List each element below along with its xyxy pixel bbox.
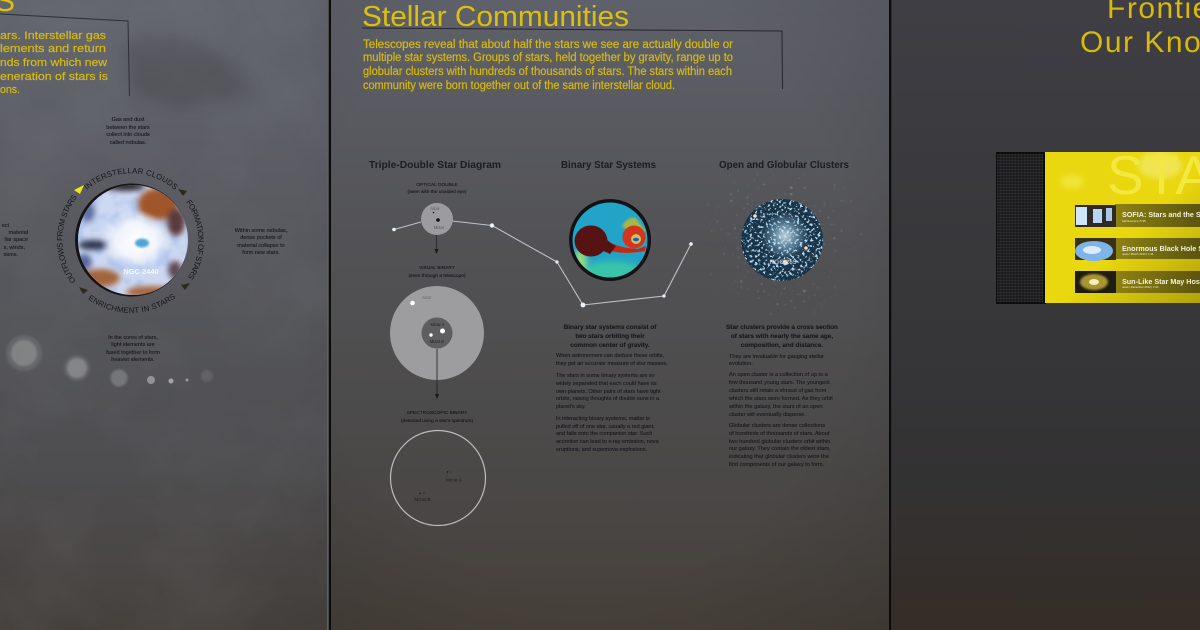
image: binary star simulation [569,199,651,283]
text block: binary star systems: two stars orbiting their [575,333,645,340]
column headings: Binary Star Systems [561,160,656,171]
ring labels [57,168,204,313]
caption: outflows: ect [2,223,9,229]
intro text: globular clusters with hundreds of thousands of stars. The stars within each [363,66,732,78]
intro text: community were born together out of the same interstellar cloud. [363,80,675,92]
image: NGC 2440 nebula [76,181,190,298]
caption: formation of stars: dense pockets of [240,235,282,241]
intro frame [0,14,130,96]
text block: binary star systems: pulled off of one star, usually a red giant, [556,424,655,430]
caption: interstellar clouds: Gas and dust [112,117,145,123]
text block: open and globular clusters [726,324,838,468]
caption: enrichment [106,335,160,363]
text block: binary star systems: common center of gravity. [570,342,650,349]
title: Stellar Communities [362,1,629,33]
text block: open and globular clusters: cluster will eventually disperse. [729,412,806,418]
panel seams [327,0,891,630]
text block: open and globular clusters: evolution. [729,361,753,367]
caption: formation of stars: Within some nebulas, [235,228,288,234]
ring labels: OUTFLOWS FROM STARS [57,194,76,283]
speaker grille [996,152,1046,304]
text block: binary star systems: own planets. Other pairs of stars have tight [556,389,661,395]
caption: outflows: llar space [4,237,28,243]
diagram: spectroscopic binary [390,410,486,526]
text block: open and globular clusters: first components of our galaxy to form. [729,462,825,468]
ring: dark backing of nebula [75,184,188,296]
intro text: Telescopes reveal that about half the stars we see are actually double or [363,39,733,51]
text block: binary star systems [555,324,668,453]
intro text [0,30,109,96]
arrow: visual to spectroscopic [435,349,439,399]
diagram: visual binary: VISUAL BINARY [419,265,456,271]
caption: interstellar clouds: collect into clouds [106,132,150,138]
text block: open and globular clusters: Star clusters provide a cross section [726,324,838,331]
intro text: nds from which new [0,57,107,69]
text block: open and globular clusters: indicating that globular clusters were the [729,454,829,460]
intro text: eneration of stars is [0,71,109,83]
diagram: optical double: Alcor [430,206,440,211]
ring arrows [74,185,190,294]
text block: open and globular clusters: two hundred globular clusters orbit within [729,439,830,445]
ring labels: FORMATION OF STARS [186,200,204,280]
intro text: lements and return [0,43,106,55]
diagram: optical double: (seen with the unaided eye) [408,189,467,195]
text block: open and globular clusters: Globular clusters are dense collections [729,423,825,429]
constellation line [392,221,693,307]
diagram: visual binary: Alcor [422,295,432,300]
text block: open and globular clusters: within the galaxy, the stars of an open [728,404,822,410]
caption: enrichment: light elements are [111,342,155,348]
text block: binary star systems: In interacting binary systems, matter is [556,416,650,422]
diagram: spectroscopic binary: SPECTROSCOPIC BINARY [407,410,468,416]
panel: stellar life cycle (left) [0,0,287,387]
ring labels: ENRICHMENT IN STARS [88,294,175,313]
intro text: ars. Interstellar gas [0,30,107,42]
text block: binary star systems: and falls onto the companion star. Such [556,431,652,437]
ring labels: INTERSTELLAR CLOUDS [84,168,178,190]
text block: binary star systems: When astronomers can deduce these orbits, [556,353,664,359]
intro frame line [362,28,782,89]
right panel heading [1080,0,1200,59]
caption: interstellar clouds: called nebulas. [110,140,147,146]
diagram: visual binary [390,265,484,380]
text block: open and globular clusters: composition, and distance. [741,342,823,349]
image: star cluster halo [708,174,862,315]
caption: formation of stars: form new stars. [242,250,280,256]
text block: open and globular clusters: of stars with nearly the same age, [731,333,833,340]
caption: outflows [2,223,28,258]
diagram: visual binary: Mizar A [431,322,445,327]
caption: outflows: sions. [4,252,18,258]
text block: binary star systems: accretion can lead to x-ray emission, nova [556,439,660,445]
story row 2 [1075,238,1200,261]
column headings [369,160,849,171]
text block: binary star systems: The stars in some binary systems are so [556,373,655,379]
intro text: ons. [0,84,20,96]
story row 2: news | March 2013 | 1:46 [1122,252,1154,256]
image label: NGC 2440 [123,267,159,276]
caption: outflows: s, winds, [4,245,25,251]
diagram: spectroscopic binary: Mizar B [414,497,431,503]
caption: interstellar clouds: between the stars [106,125,150,131]
caption: enrichment: fused together to form [106,350,160,356]
column headings: Open and Globular Clusters [719,160,849,171]
caption: formation of stars: material collapse to [237,243,285,249]
text block: open and globular clusters: of hundreds of thousands of stars. About [729,431,830,437]
diagram: optical double [408,182,467,235]
diagram: visual binary: Mizar B [430,339,444,344]
intro text: multiple star systems. Groups of stars, held together by gravity, range up to [363,52,733,64]
text block: open and globular clusters: An open cluster is a collection of up to a [729,372,829,378]
diagram: visual binary: (seen through a telescope) [408,273,466,279]
image: star cluster [740,198,824,282]
text block: binary star systems: orbits, raising thoughts of double suns in a [556,396,660,402]
text block: binary star systems: widely separated that each could have its [555,381,657,387]
text block: open and globular clusters: clusters still retain a shroud of gas from [729,388,827,394]
image: star cluster: NGC 265 [769,259,797,266]
diagram: spectroscopic binary: Mizar A [446,478,463,484]
story row 1 [1075,204,1200,227]
text block: open and globular clusters: our galaxy. They contain the oldest stars, [729,446,831,452]
story row 3 [1075,271,1200,293]
caption: enrichment: heavier elements. [111,357,155,363]
text block: binary star systems: eruptions, and supernova explosions. [556,447,648,453]
caption: interstellar clouds [106,117,150,146]
caption: formation of stars [235,228,288,256]
caption: enrichment: In the cores of stars, [108,335,158,341]
fading star bubbles [6,335,213,386]
story row 1: Astronomers | 5:35 [1122,219,1146,223]
text block: open and globular clusters: few thousand young stars. The youngest [729,380,830,386]
caption: outflows: material [8,230,28,236]
diagram: optical double: OPTICAL DOUBLE [416,182,458,188]
column headings: Triple-Double Star Diagram [369,160,501,171]
diagram: optical double: Mizar [434,225,445,230]
story row 3: news | December 2012 | 1:04 [1122,285,1159,289]
intro text [363,39,733,92]
arrow: optical to visual [434,235,438,254]
text block: open and globular clusters: They are invaluable for gauging stellar [729,354,824,360]
text block: binary star systems: Binary star systems consist of [564,324,657,331]
video screen [1045,144,1200,303]
text block: binary star systems: they get an accurate measure of star masses. [556,361,668,367]
text block: open and globular clusters: which the stars were formed. As they orbit [728,396,833,402]
diagram: spectroscopic binary: (detected using a star's spectrum) [401,418,473,424]
text block: binary star systems: planet's sky. [556,404,586,410]
